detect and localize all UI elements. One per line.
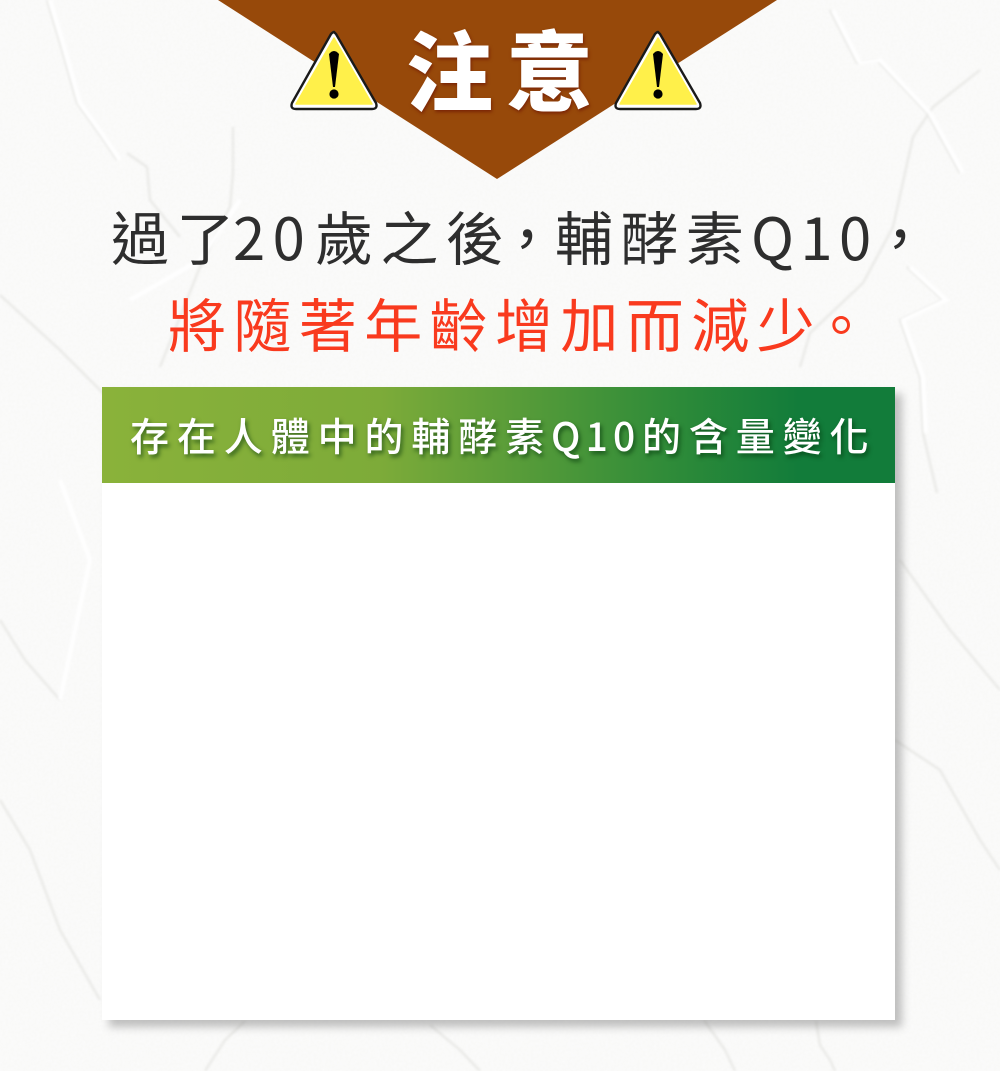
headline line 1: 20 — [233, 193, 312, 277]
icon: right warning triangle — [614, 30, 702, 110]
panel heading: green gradient band: Q10 — [551, 407, 640, 463]
panel heading: green gradient band: 存在人體中的輔酵素 — [130, 407, 552, 463]
headline line 1: ， — [498, 193, 563, 277]
panel: white chart card — [102, 387, 895, 1020]
headline line 2: 將隨著年齡增加而減少 — [168, 280, 822, 364]
panel heading: green gradient band: 的含量變化 — [642, 407, 877, 463]
headline line 1: ， — [871, 193, 936, 277]
title: 注意: 意 — [506, 4, 593, 130]
icon: left warning triangle — [290, 30, 378, 110]
headline line 1: 歲之後 — [315, 193, 511, 277]
headline line 2: 。 — [812, 280, 877, 364]
headline line 1: 過了 — [111, 193, 242, 277]
headline line 1: Q10 — [751, 193, 878, 277]
headline line 1 — [111, 193, 936, 277]
panel heading: green gradient band — [102, 387, 895, 483]
title: 注意 — [406, 4, 593, 130]
heading banner: brown downward triangle — [218, 0, 777, 179]
headline line 1: 輔酵素 — [555, 193, 751, 277]
title: 注意: 注 — [406, 4, 493, 130]
